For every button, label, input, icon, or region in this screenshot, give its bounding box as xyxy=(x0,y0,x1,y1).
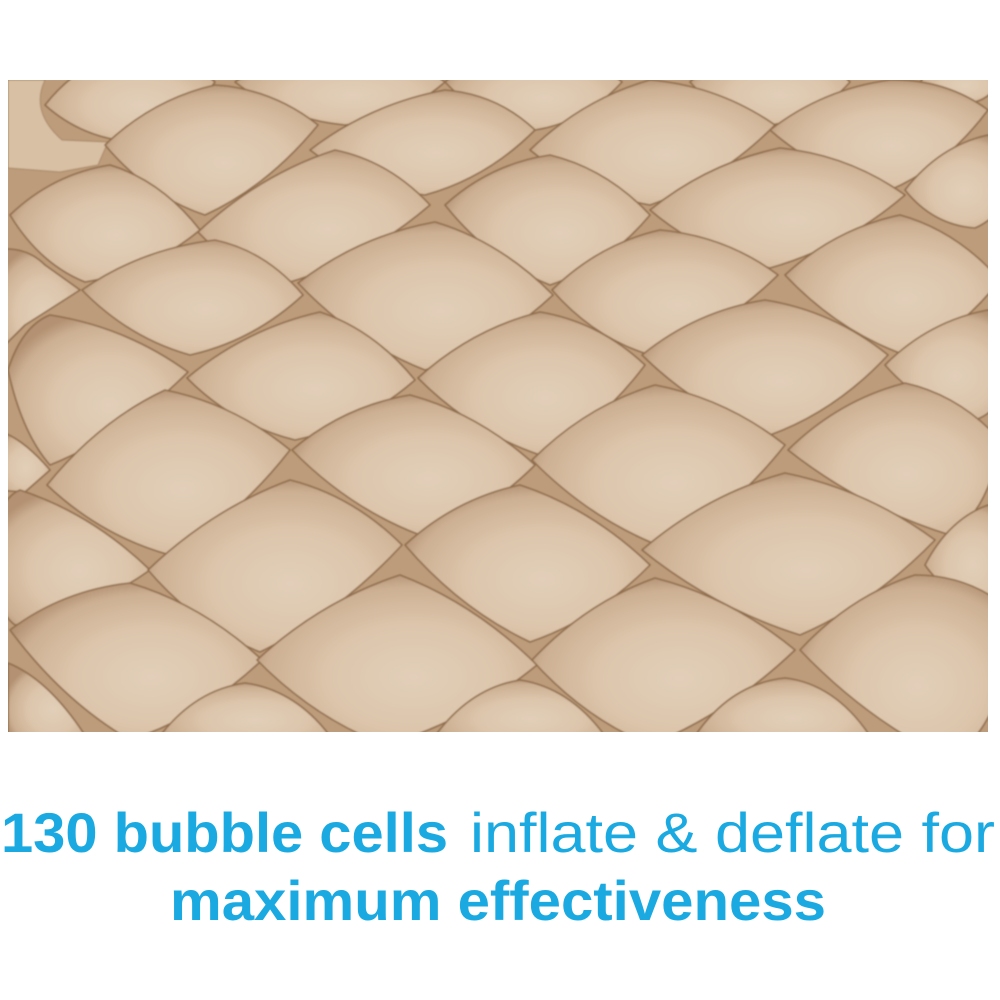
caption xyxy=(1,801,995,932)
cell row 3 xyxy=(10,135,1000,285)
cell row 9 xyxy=(8,662,869,732)
photo: mattress bubble cells xyxy=(8,80,988,732)
cell row 7 xyxy=(0,473,1000,652)
cell row 5 xyxy=(8,300,1000,465)
caption line 1: regular part: inflate & deflate for xyxy=(470,801,995,864)
mattress edge tube xyxy=(8,80,108,172)
caption line 2: maximum effectiveness xyxy=(170,869,826,932)
cell row 4 xyxy=(0,215,1000,370)
cell row 1 xyxy=(44,80,988,140)
cell row 2 xyxy=(105,80,988,215)
cell row 8 xyxy=(8,574,988,732)
cell row 6 xyxy=(0,383,1000,555)
caption line 1: bold part: 130 bubble cells xyxy=(1,801,448,864)
